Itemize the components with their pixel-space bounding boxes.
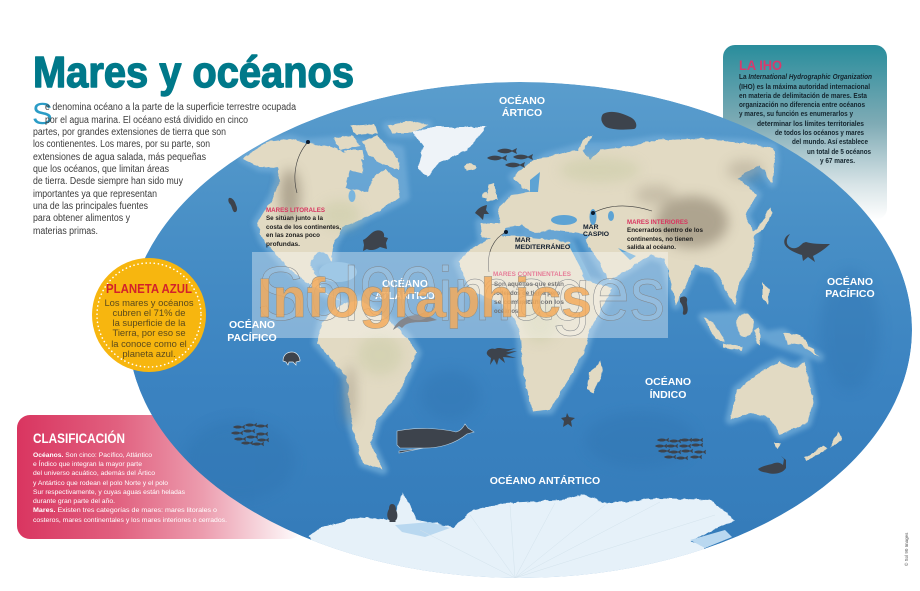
callout: mares interiores: MARES INTERIORES (627, 219, 689, 226)
world map (128, 82, 912, 590)
panel text: clasificación: Sur respectivamente, y cuyas aguas están heladas (33, 489, 186, 496)
label: mar mediterráneo: MEDITERRÁNEO (515, 242, 570, 251)
panel text: clasificación (33, 431, 227, 524)
label: océano pacífico este: PACÍFICO (825, 287, 875, 300)
icon: fish school left (231, 423, 269, 446)
inland seas (348, 172, 636, 280)
deep ocean shading (185, 270, 880, 500)
antarctic meridians (420, 502, 715, 578)
intro text block: los contienentes. Los mares, por su parte, son (33, 139, 210, 150)
ocean (128, 82, 912, 578)
callout: mares continentales: se comunican con los (494, 299, 564, 306)
panel text: La IHO: (IHO) es la máxima autoridad internacional (739, 84, 870, 91)
relief shading (280, 160, 763, 425)
panel text: clasificación: durante gran parte del año. (33, 498, 115, 505)
intro text block: para obtener alimentos y (33, 213, 130, 224)
callout: mares litorales (266, 207, 341, 248)
eurasia (480, 138, 775, 305)
marker dots (306, 140, 595, 234)
intro text block: e denomina océano a la parte de la superficie terrestre ocupada (45, 102, 296, 113)
icon: sea creature left (228, 198, 237, 212)
badge: planeta azul: cubren el 71% de (113, 307, 185, 318)
panel text: La IHO: en materia de delimitación de mares. Esta (739, 93, 867, 100)
label: océano pacífico oeste: PACÍFICO (227, 331, 277, 344)
arctic islands (333, 121, 428, 170)
intro text block: S (32, 96, 53, 131)
intro text block: importantes ya que representan (33, 189, 157, 200)
label: mar caspio: CASPIO (583, 231, 609, 238)
label: océano atlántico: ATLÁNTICO (375, 289, 435, 302)
label: océano índico: ÍNDICO (650, 388, 686, 401)
antarctica (308, 492, 735, 578)
iceland, britain, novaya zemlya (464, 136, 592, 201)
icon: sea turtle lower right (758, 456, 786, 474)
badge: planeta azul: planeta azul. (122, 348, 176, 359)
continents (243, 121, 842, 470)
icon: whale (397, 424, 474, 453)
credit: © Sol 90 Images (903, 532, 909, 566)
title: Mares y océanos (33, 48, 354, 97)
vegetation shading (320, 158, 640, 375)
panel text: clasificación: Mares. Existen tres categorías de mares: mares litorales o (33, 507, 217, 514)
badge: planeta azul: Los mares y océanos (104, 297, 194, 308)
greenland (413, 127, 487, 177)
panel: clasificación background (17, 415, 302, 539)
panel text: clasificación: y Antártico que rodean el polo Norte y el polo (33, 480, 168, 487)
australia and oceania (703, 282, 842, 461)
callout: mares litorales: profundas. (266, 241, 300, 248)
label: océano pacífico este: OCÉANO (827, 275, 873, 288)
panel text: La IHO: y 67 mares. (820, 158, 855, 165)
continental shelf glow (243, 125, 820, 470)
intro text block: materias primas. (33, 226, 98, 237)
intro text block: de tierra. Desde siempre han sido muy (33, 176, 183, 187)
label: mar mediterráneo: MAR (515, 237, 531, 244)
icon: starfish (561, 413, 575, 427)
badge: planeta azul: la conoce como el (111, 338, 187, 349)
panel text: La IHO: del mundo. Así establece (792, 139, 868, 146)
intro text block: partes, por grandes extensiones de tierra que son (33, 127, 226, 138)
callout: mares litorales: MARES LITORALES (266, 207, 326, 214)
icon: penguin (387, 504, 397, 522)
panel text: clasificación: CLASIFICACIÓN (33, 431, 125, 446)
panel text: La IHO: organización no diferencia entre océanos (739, 102, 865, 109)
south america (317, 300, 417, 470)
label: mar caspio: MAR (583, 224, 599, 231)
panel text: clasificación: del universo acuático, además del Ártico (33, 468, 155, 477)
icon: octopus (487, 348, 517, 365)
panel text: clasificación: e Índico que integran la mayor parte (33, 459, 142, 468)
panel: La IHO background (723, 45, 887, 220)
icon: dolphin (393, 312, 437, 330)
callout: mares litorales: costa de los continentes, (266, 224, 341, 231)
panel text: La IHO (739, 57, 872, 165)
icon: shark (784, 234, 830, 262)
callout: mares interiores (627, 219, 703, 251)
callout: mares continentales (493, 271, 572, 315)
callout: mares continentales: MARES CONTINENTALES (493, 271, 572, 278)
badge: planeta azul: PLANETA AZUL (106, 282, 192, 296)
intro text block: extensiones de agua salada, más pequeñas (33, 152, 206, 163)
label: océano atlántico: OCÉANO (382, 277, 428, 290)
icon: walrus (601, 112, 636, 130)
badge: planeta azul: Tierra, por eso se (112, 327, 186, 338)
callout: mares continentales: océanos. (494, 308, 520, 315)
intro text block: una de las principales fuentes (33, 201, 148, 212)
intro text block (32, 96, 296, 237)
panel text: La IHO: LA IHO (739, 57, 782, 73)
panel text: La IHO: de todos los océanos y mares (775, 130, 864, 137)
ice shelves (395, 522, 732, 548)
callout: mares continentales: Son aquellos que están (494, 281, 564, 288)
label: océano índico: OCÉANO (645, 375, 691, 388)
label: océano ártico: OCÉANO (499, 94, 545, 107)
label: océano pacífico oeste: OCÉANO (229, 318, 275, 331)
panel text: La IHO: determinar los límites territoriales (757, 121, 864, 128)
badge: planeta azul (92, 258, 206, 372)
callout: mares litorales: Se sitúan junto a la (266, 215, 323, 222)
madagascar (587, 361, 603, 393)
label: océano ártico: ÁRTICO (502, 106, 542, 119)
callout: mares continentales: rodeados de tierra pero (494, 290, 560, 297)
arrow: interiores leader (593, 206, 652, 213)
icon: fish group (487, 148, 533, 168)
callout: mares interiores: continentes, no tienen (627, 236, 693, 243)
panel text: clasificación: Océanos. Son cinco: Pacífico, Atlántico (33, 452, 152, 459)
callout: mares interiores: salida al océano. (627, 244, 676, 251)
badge: planeta azul: la superficie de la (113, 317, 186, 328)
label: océano antártico: OCÉANO ANTÁRTICO (490, 474, 600, 487)
icon: jellyfish (283, 352, 300, 365)
icon: seahorse (680, 297, 688, 315)
icon: turtle (363, 230, 388, 251)
arrow: continentales leader (488, 232, 506, 272)
intro text block: por el agua marina. El océano está dividido en cinco (45, 115, 248, 126)
panel text: La IHO: un total de 5 océanos (807, 149, 871, 156)
gulf of mexico (319, 262, 357, 282)
arrow: litorales leader (295, 142, 308, 193)
watermark: Sol90images (257, 252, 665, 337)
panel text: La IHO: y mares, su función es enumerarlos y (739, 111, 853, 118)
africa (458, 236, 612, 412)
panel text: La IHO: La International Hydrographic Organization (739, 74, 872, 81)
callout: mares interiores: Encerrados dentro de los (627, 227, 703, 234)
callout: mares litorales: en las zonas poco (266, 232, 320, 239)
intro text block: que los océanos, que limitan áreas (33, 164, 169, 175)
icon: small turtle (475, 205, 489, 220)
panel text: clasificación: costeros, mares continentales y los mares interiores o cerrados. (33, 517, 227, 524)
north america (243, 139, 400, 303)
watermark: Infographics (257, 266, 592, 329)
icon: fish school right (655, 438, 706, 460)
japan (752, 208, 773, 236)
